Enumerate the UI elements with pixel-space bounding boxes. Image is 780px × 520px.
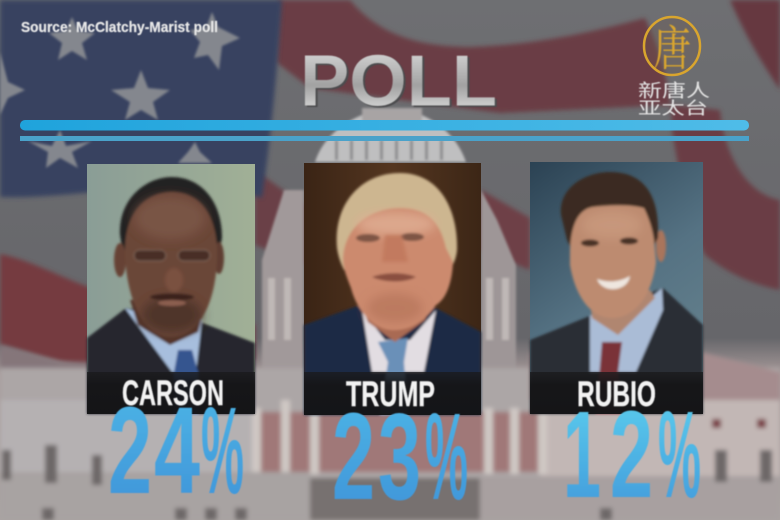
percentage: Carson 24% <box>108 383 244 520</box>
percentage: Rubio 12%: 1 <box>563 387 601 520</box>
hair <box>561 172 658 250</box>
shirt and tie <box>125 308 202 372</box>
shirt <box>590 288 663 372</box>
percentage: Carson 24%: 2 <box>108 383 152 520</box>
flag canton with stars <box>0 0 282 198</box>
jacket <box>87 308 255 414</box>
logo: NTD Asia Pacific: 亚太台 <box>638 99 708 118</box>
name band: Trump: TRUMP <box>346 375 435 414</box>
ears <box>114 243 126 277</box>
Capitol building <box>0 345 780 520</box>
neck <box>360 300 432 342</box>
jacket <box>530 288 703 414</box>
percentage: Rubio 12% <box>563 387 701 520</box>
flag stripes <box>0 0 780 366</box>
title: POLL: POLL <box>300 42 497 122</box>
neck <box>590 290 655 335</box>
name band: Rubio: RUBIO <box>577 375 656 414</box>
name band: Rubio <box>530 372 703 414</box>
name band: Carson <box>87 372 255 414</box>
face <box>570 205 656 318</box>
divider bars <box>20 120 749 141</box>
shirt <box>362 310 436 372</box>
portrait: Carson <box>87 164 255 414</box>
percentage: Trump 23% <box>332 389 468 520</box>
portrait: Trump <box>304 163 481 415</box>
neck <box>130 300 205 345</box>
source credit: Source: McClatchy-Marist poll <box>21 19 218 36</box>
face <box>125 192 217 337</box>
text: % <box>658 387 701 520</box>
percentage: Rubio 12%: 2 <box>610 387 653 520</box>
percentage: Carson 24%: 4 <box>154 383 200 520</box>
ears <box>656 230 666 262</box>
text: % <box>201 383 244 520</box>
jacket <box>304 305 481 415</box>
tie <box>596 342 622 414</box>
tie <box>378 338 408 415</box>
logo ring <box>644 17 700 75</box>
portrait: Rubio <box>530 162 703 414</box>
name band: Carson: CARSON <box>122 374 224 413</box>
logo caption: 新唐人 <box>638 81 710 101</box>
face <box>343 208 453 330</box>
logo: NTD Asia Pacific <box>638 10 710 118</box>
name band: Trump <box>304 372 481 415</box>
hair <box>120 177 222 260</box>
logo: NTD Asia Pacific: 唐 <box>653 10 691 79</box>
Capitol dome <box>262 108 516 372</box>
title: POLL: POLL <box>302 43 499 123</box>
hair <box>337 173 457 270</box>
